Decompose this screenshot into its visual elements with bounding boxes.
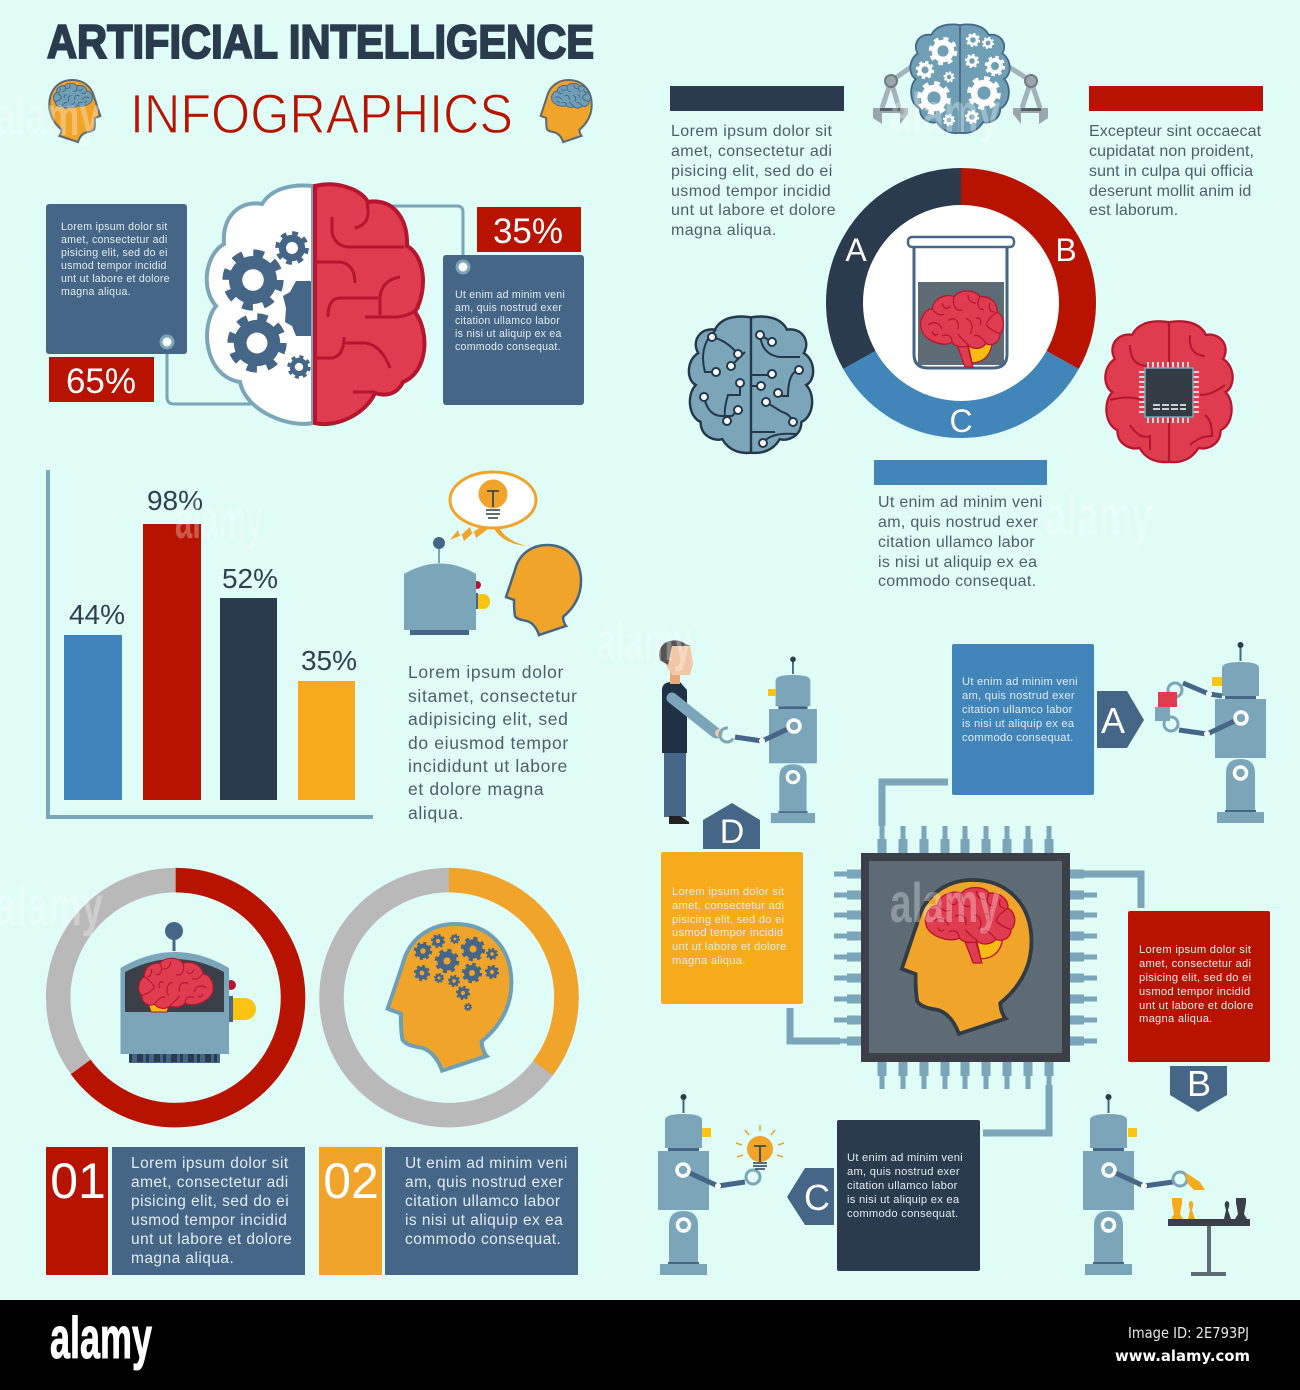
- text box C: is nisi ut aliquip ex ea: [847, 1194, 960, 1206]
- text box: right brain: is nisi ut aliquip ex ea: [455, 328, 562, 340]
- watermarks: alamy: [890, 871, 1000, 934]
- icon: head with gears: [388, 924, 511, 1071]
- tag C: C: [804, 1177, 830, 1218]
- microchip with head: [834, 826, 1097, 1089]
- percent label: 65%: 65%: [66, 362, 136, 401]
- icon: puzzle robot: [1155, 642, 1266, 823]
- text panel 02: Ut enim ad minim veni: [405, 1155, 568, 1172]
- bar chart: [48, 470, 373, 817]
- right hemisphere organic: [315, 184, 424, 424]
- text box D: [661, 852, 803, 1004]
- tag C: [787, 1168, 834, 1225]
- text block: top left of donut: magna aliqua.: [671, 222, 777, 239]
- watermarks: alamy: [175, 487, 263, 550]
- image id: Image ID: 2E793PJ: [1128, 1324, 1249, 1342]
- watermarks: alamy: [890, 81, 1000, 144]
- icon: brain in beaker: [908, 237, 1014, 368]
- tag A: A: [1101, 700, 1125, 741]
- text box C: am, quis nostrud exer: [847, 1166, 960, 1178]
- heading bar: red: [1089, 86, 1263, 111]
- icon: robotic gear brain with claws: [873, 24, 1048, 133]
- number tile 02: 02: [323, 1153, 379, 1209]
- tag D: D: [720, 813, 744, 851]
- text box D: amet, consectetur adi: [672, 900, 784, 912]
- text block: middle left: adipisicing elit, sed: [408, 709, 569, 729]
- text block: middle left: et dolore magna: [408, 779, 544, 799]
- footer bar: [0, 1300, 1300, 1390]
- icon: circuit brain: [689, 316, 813, 453]
- segment A: [845, 186, 961, 360]
- text box B: pisicing elit, sed do ei: [1139, 972, 1251, 984]
- alamy logo: alamy: [50, 1306, 152, 1371]
- text panel 01: pisicing elit, sed do ei: [131, 1193, 289, 1210]
- bar 44%: 44%: [69, 599, 125, 630]
- text box: left brain: Lorem ipsum dolor sit: [61, 221, 168, 233]
- text box C: [837, 1120, 980, 1271]
- text block: below donut: citation ullamco labor: [878, 534, 1035, 551]
- text box: right brain: Ut enim ad minim veni: [455, 289, 565, 301]
- connector lines: chip to boxes: [790, 782, 1141, 1133]
- text block: middle left: aliqua.: [408, 803, 464, 823]
- text block: top right of donut: est laborum.: [1089, 202, 1178, 219]
- percent label: 65%: [49, 357, 154, 402]
- text block: middle left: Lorem ipsum dolor: [408, 662, 564, 682]
- heading bar: dark: [670, 86, 844, 111]
- number tile 01: [46, 1147, 108, 1275]
- text box A: am, quis nostrud exer: [962, 690, 1075, 702]
- chip pins: [834, 826, 1097, 1089]
- text box: left brain: unt ut labore et dolore: [61, 273, 170, 285]
- text box A: citation ullamco labor: [962, 704, 1073, 716]
- text panel 01: magna aliqua.: [131, 1250, 234, 1267]
- text box: left brain: usmod tempor incidid: [61, 260, 167, 272]
- text block: middle left: sitamet, consectetur: [408, 686, 578, 706]
- text box: right brain: am, quis nostrud exer: [455, 302, 562, 314]
- icon: robot with light bulb: [658, 1094, 784, 1275]
- text block: top right of donut: Excepteur sint occaecat: [1089, 123, 1262, 140]
- text box: left brain: [46, 204, 187, 354]
- text box A: is nisi ut aliquip ex ea: [962, 718, 1075, 730]
- watermarks: alamy: [597, 609, 692, 672]
- text box A: commodo consequat.: [962, 732, 1073, 744]
- icon: red brain with microchip: [1105, 321, 1233, 462]
- text box D: pisicing elit, sed do ei: [672, 914, 784, 926]
- bar 98%: [143, 485, 203, 800]
- tag A: [1097, 691, 1144, 748]
- bar 35%: [298, 645, 357, 800]
- text block: below donut: commodo consequat.: [878, 573, 1036, 590]
- text box C: citation ullamco labor: [847, 1180, 958, 1192]
- watermarks: [0, 81, 1153, 937]
- tag B: [1170, 1063, 1227, 1112]
- text panel 01: [112, 1147, 305, 1275]
- donut chart: A B C: [845, 186, 1077, 439]
- text box: right brain: citation ullamco labor: [455, 315, 560, 327]
- heading bar: blue: [874, 460, 1047, 485]
- title: Artificial Intelligence: ARTIFICIAL INTELLIGENCE: [47, 15, 594, 68]
- text block: top left of donut: amet, consectetur adi: [671, 143, 832, 160]
- donut chart: A B C: C: [949, 403, 973, 439]
- tag B: B: [1187, 1063, 1211, 1104]
- text box B: unt ut labore et dolore: [1139, 1000, 1254, 1012]
- text box: right brain: [443, 255, 584, 405]
- segment C: [859, 360, 1063, 419]
- text panel 02: commodo consequat.: [405, 1231, 561, 1248]
- text box: left brain: pisicing elit, sed do ei: [61, 247, 168, 259]
- watermarks: alamy: [1045, 484, 1153, 547]
- text block: top left of donut: Lorem ipsum dolor sit: [671, 123, 832, 140]
- text box B: usmod tempor incidid: [1139, 986, 1250, 998]
- ring chart 01: [58, 880, 293, 1115]
- text box D: Lorem ipsum dolor sit: [672, 886, 785, 898]
- subtitle: Infographics: INFOGRAPHICS: [130, 82, 513, 145]
- text panel 01: usmod tempor incidid: [131, 1212, 287, 1229]
- icon: man shaking hands: [659, 640, 723, 824]
- text block: top right of donut: cupidatat non proident,: [1089, 143, 1254, 160]
- website: www.alamy.com: [1115, 1347, 1250, 1365]
- icon: head with brain, left: [49, 80, 100, 142]
- icon: robot playing chess: [1083, 1094, 1250, 1276]
- icon: robot head facing human: [404, 537, 490, 635]
- number tile 01: 01: [50, 1153, 106, 1209]
- ring chart 02: [332, 880, 566, 1115]
- text box C: commodo consequat.: [847, 1208, 958, 1220]
- percent label: 35%: [477, 207, 581, 252]
- bar 44%: [64, 599, 125, 800]
- text box B: Lorem ipsum dolor sit: [1139, 944, 1252, 956]
- bar 52%: 52%: [222, 563, 278, 594]
- text box: right brain: commodo consequat.: [455, 341, 561, 353]
- text box B: amet, consectetur adi: [1139, 958, 1251, 970]
- text box: left brain: magna aliqua.: [61, 286, 131, 298]
- text block: top right of donut: sunt in culpa qui officia: [1089, 163, 1253, 180]
- text block: below donut: Ut enim ad minim veni: [878, 494, 1043, 511]
- number tile 02: [319, 1147, 382, 1275]
- text panel 02: is nisi ut aliquip ex ea: [405, 1212, 563, 1229]
- icon: robot head with brain: [120, 922, 256, 1063]
- text block: middle left: incididunt ut labore: [408, 756, 568, 776]
- text block: below donut: is nisi ut aliquip ex ea: [878, 554, 1037, 571]
- text box B: [1128, 911, 1270, 1062]
- text box C: Ut enim ad minim veni: [847, 1152, 963, 1164]
- icon: head with brain, right: [541, 80, 592, 142]
- text box D: unt ut labore et dolore: [672, 941, 787, 953]
- text block: top right of donut: deserunt mollit anim id: [1089, 183, 1251, 200]
- text block: middle left: do eiusmod tempor: [408, 733, 569, 753]
- text box A: Ut enim ad minim veni: [962, 676, 1078, 688]
- text box D: usmod tempor incidid: [672, 927, 783, 939]
- tag D: [703, 803, 760, 851]
- text block: below donut: am, quis nostrud exer: [878, 514, 1039, 531]
- text box D: magna aliqua.: [672, 955, 746, 967]
- connector lines: brain to text boxes: [167, 206, 463, 404]
- segment B: [961, 186, 1077, 360]
- icon: handshake robot: [717, 657, 817, 823]
- text block: top left of donut: usmod tempor incidid: [671, 183, 831, 200]
- text box B: magna aliqua.: [1139, 1013, 1213, 1025]
- bar 52%: [220, 563, 278, 800]
- left hemisphere with gears: [207, 186, 313, 424]
- text panel 02: citation ullamco labor: [405, 1193, 561, 1210]
- text panel 01: amet, consectetur adi: [131, 1174, 289, 1191]
- illustration: half gear half organic brain: [207, 184, 424, 424]
- donut chart: A B C: B: [1055, 232, 1077, 268]
- text panel 01: Lorem ipsum dolor sit: [131, 1155, 289, 1172]
- text block: top left of donut: pisicing elit, sed do ei: [671, 163, 833, 180]
- icon: human head orange: [506, 545, 581, 635]
- text block: top left of donut: unt ut labore et dolore: [671, 202, 836, 219]
- text panel 02: [385, 1147, 578, 1275]
- percent label: 35%: 35%: [493, 212, 563, 251]
- text panel 02: am, quis nostrud exer: [405, 1174, 564, 1191]
- text box A: [952, 644, 1094, 795]
- icon: speech bubble with light bulb: [450, 472, 536, 546]
- bar 35%: 35%: [301, 645, 357, 676]
- text panel 01: unt ut labore et dolore: [131, 1231, 292, 1248]
- bar 98%: 98%: [147, 485, 203, 516]
- axes: [48, 470, 373, 817]
- donut chart: A B C: A: [845, 232, 867, 268]
- text box: left brain: amet, consectetur adi: [61, 234, 168, 246]
